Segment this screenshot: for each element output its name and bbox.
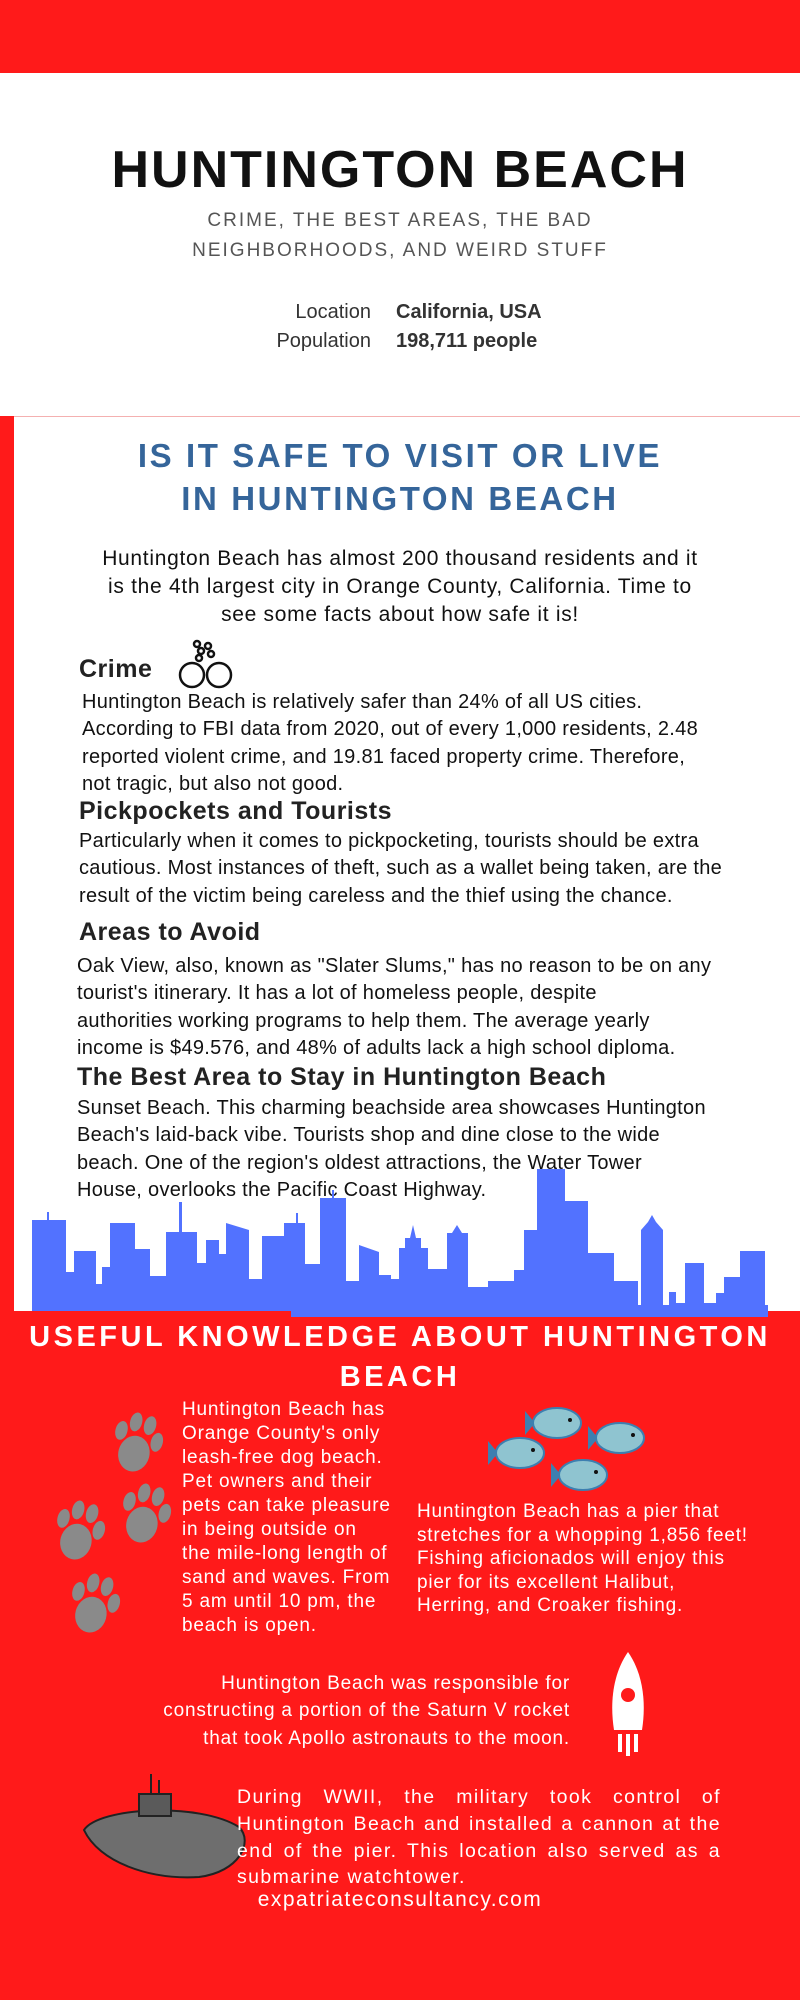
saturn v text: Huntington Beach was responsible for	[221, 1673, 570, 1694]
website url: expatriateconsultancy.com	[258, 1888, 542, 1911]
areas text	[77, 955, 711, 1059]
crime text	[82, 691, 698, 795]
icon: rocket	[612, 1652, 644, 1756]
pickpockets text: cautious. Most instances of theft, such as a wallet being taken, are the	[79, 857, 722, 879]
saturn v text: constructing a portion of the Saturn V rocket	[163, 1700, 570, 1721]
useful knowledge heading: BEACH	[340, 1361, 460, 1393]
pier text: Huntington Beach has a pier that	[417, 1501, 719, 1522]
intro text	[102, 547, 698, 626]
dog beach text: Orange County's only	[182, 1423, 380, 1444]
dog beach text: leash-free dog beach.	[182, 1447, 383, 1468]
location and population: Population	[276, 330, 371, 352]
crime text: reported violent crime, and 19.81 faced property crime. Therefore,	[82, 746, 685, 768]
dog beach text: sand and waves. From	[182, 1567, 390, 1588]
pickpockets heading: Pickpockets and Tourists	[79, 797, 392, 825]
useful knowledge heading	[29, 1321, 771, 1393]
dog beach text: Pet owners and their	[182, 1471, 372, 1492]
icon: fish	[488, 1407, 645, 1491]
section heading: IS IT SAFE TO VISIT OR LIVE	[138, 437, 662, 474]
areas text: Oak View, also, known as "Slater Slums," has no reason to be on any	[77, 955, 711, 977]
pier text: Herring, and Croaker fishing.	[417, 1595, 683, 1616]
dog beach text: the mile-long length of	[182, 1543, 387, 1564]
wwii text	[237, 1786, 721, 1888]
best area text: House, overlooks the Pacific Coast Highway.	[77, 1179, 486, 1201]
icon: submarine	[82, 1774, 246, 1878]
saturn v text: that took Apollo astronauts to the moon.	[203, 1728, 570, 1749]
location and population: Location	[295, 301, 371, 323]
useful knowledge heading: USEFUL KNOWLEDGE ABOUT HUNTINGTON	[29, 1321, 771, 1353]
best area text: beach. One of the region's oldest attractions, the Water Tower	[77, 1152, 642, 1174]
left red stripe	[0, 416, 14, 1316]
icon: paw prints	[57, 1412, 172, 1632]
pickpockets text	[79, 830, 722, 907]
skyline	[32, 1169, 768, 1317]
red bottom section	[0, 1311, 800, 2000]
dog beach text: pets can take pleasure	[182, 1495, 391, 1516]
crime heading: Crime	[79, 655, 152, 683]
intro text: see some facts about how safe it is!	[221, 603, 579, 626]
location and population	[276, 301, 542, 352]
pier text: Fishing aficionados will enjoy this	[417, 1548, 725, 1569]
section heading	[138, 437, 662, 517]
crime text: Huntington Beach is relatively safer than 24% of all US cities.	[82, 691, 642, 713]
subtitle	[192, 210, 608, 261]
pier text: pier for its excellent Halibut,	[417, 1572, 675, 1592]
wwii text: During WWII, the military took control of	[237, 1786, 721, 1808]
best area text: Sunset Beach. This charming beachside area showcases Huntington	[77, 1097, 706, 1119]
pickpockets text: result of the victim being careless and the thief using the chance.	[79, 885, 673, 907]
best area text: Beach's laid-back vibe. Tourists shop and dine close to the wide	[77, 1124, 660, 1146]
dog beach text	[182, 1399, 391, 1636]
intro text: Huntington Beach has almost 200 thousand residents and it	[102, 547, 698, 570]
wwii text: Huntington Beach and installed a cannon at the	[237, 1813, 721, 1835]
crime text: not tragic, but also not good.	[82, 773, 343, 795]
location and population: 198,711 people	[396, 330, 537, 352]
areas text: income is $49.576, and 48% of adults lack a high school diploma.	[77, 1037, 675, 1059]
areas to avoid heading: Areas to Avoid	[79, 918, 261, 946]
dog beach text: in being outside on	[182, 1519, 357, 1540]
dog beach text: beach is open.	[182, 1615, 317, 1636]
areas text: authorities working programs to help them. The average yearly	[77, 1010, 650, 1032]
pier text	[417, 1501, 748, 1616]
intro text: is the 4th largest city in Orange County, California. Time to	[108, 575, 692, 598]
best area text	[77, 1097, 706, 1201]
crime text: According to FBI data from 2020, out of every 1,000 residents, 2.48	[82, 718, 698, 740]
pier text: stretches for a whopping 1,856 feet!	[417, 1524, 748, 1546]
subtitle: CRIME, THE BEST AREAS, THE BAD	[207, 210, 593, 231]
dog beach text: Huntington Beach has	[182, 1399, 385, 1420]
top red band	[0, 0, 800, 73]
location and population: California, USA	[396, 301, 542, 323]
wwii text: end of the pier. This location also served as a	[237, 1840, 721, 1862]
areas text: tourist's itinerary. It has a lot of homeless people, despite	[77, 982, 597, 1004]
title: HUNTINGTON BEACH	[111, 141, 689, 199]
dog beach text: 5 am until 10 pm, the	[182, 1591, 376, 1612]
subtitle: NEIGHBORHOODS, AND WEIRD STUFF	[192, 240, 608, 261]
pickpockets text: Particularly when it comes to pickpocketing, tourists should be extra	[79, 830, 699, 852]
icon: handcuffs	[178, 640, 232, 688]
best area heading: The Best Area to Stay in Huntington Beach	[77, 1063, 606, 1091]
wwii text: submarine watchtower.	[237, 1866, 466, 1888]
section heading: IN HUNTINGTON BEACH	[181, 480, 619, 517]
saturn v text	[163, 1673, 570, 1749]
